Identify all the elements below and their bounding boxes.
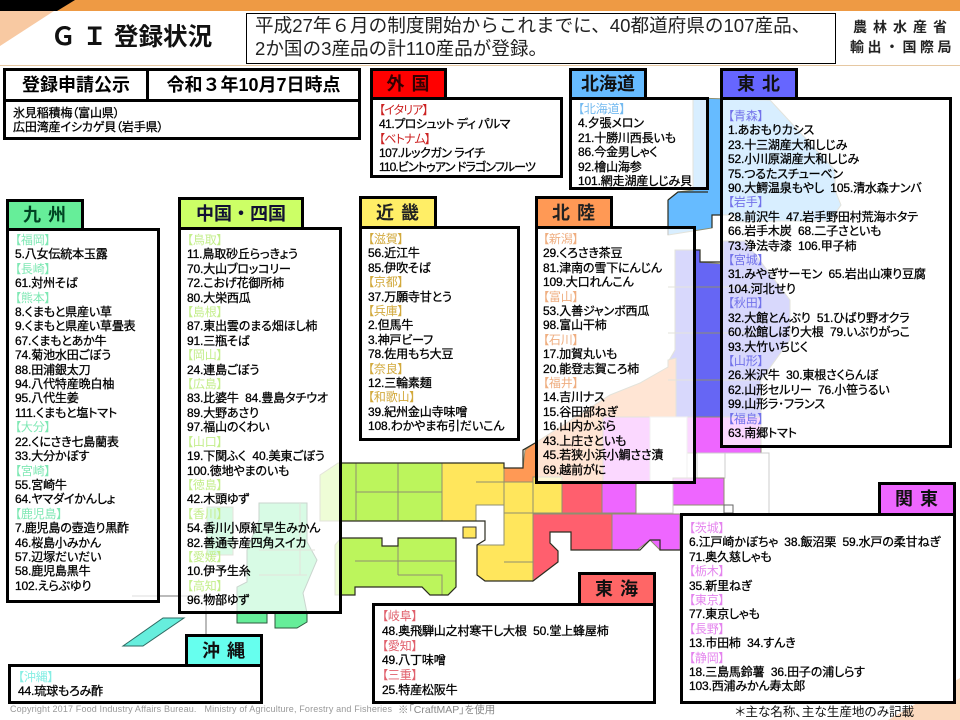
text: Hokuriku list: 69.越前がに — [543, 462, 606, 476]
text: Kanto list: 18.三島馬鈴薯 36.田子の浦しらす — [689, 665, 865, 679]
text: Chugoku and Shikoku list: 【愛媛】 — [187, 550, 222, 564]
text: Kanto list: 35.新里ねぎ — [689, 579, 751, 593]
text: Okinawa list — [18, 670, 103, 698]
panel: Tokai — [372, 572, 656, 704]
tab: Kinki: 近 畿 — [376, 203, 420, 223]
text: Chugoku and Shikoku list: 【広島】 — [187, 377, 222, 391]
text: Tokai list: 48.奥飛騨山之村寒干し大根 50.堂上蜂屋柿 — [382, 624, 609, 638]
box: Tokai — [372, 603, 656, 704]
ministry name: 輸出・国際局 — [850, 39, 955, 55]
text: Chugoku and Shikoku list — [187, 233, 328, 607]
text: Chugoku and Shikoku list: 【徳島】 — [187, 478, 222, 492]
text: Chugoku and Shikoku list: 【島根】 — [187, 305, 222, 319]
text: Hokuriku list: 109.大口れんこん — [543, 275, 634, 289]
text: Kinki list: 12.三輪素麺 — [368, 376, 432, 390]
text: Hokuriku list: 【新潟】 — [543, 232, 578, 246]
text: Kinki list — [368, 232, 504, 433]
map region: Shikoku — [335, 538, 456, 595]
text: Kanto list: 6.江戸崎かぼちゃ 38.飯沼栗 59.水戸の柔甘ねぎ — [689, 535, 940, 549]
text: Kinki list: 【滋賀】 — [368, 232, 403, 246]
ministry name — [850, 19, 955, 55]
box: Chugoku and Shikoku — [178, 227, 342, 614]
text: Chugoku and Shikoku list: 70.大山ブロッコリー — [187, 262, 291, 276]
text: Kyushu list — [15, 233, 136, 593]
text: Kyushu list: 【熊本】 — [15, 291, 50, 305]
text: Kyushu list: 67.くまもとあか牛 — [15, 334, 106, 348]
tab: Okinawa — [185, 634, 263, 666]
text: Hokuriku list: 43.上庄さといも — [543, 434, 626, 448]
text: Kanto list: 【長野】 — [689, 622, 724, 636]
text: Kanto list: 【栃木】 — [689, 564, 724, 578]
text: Chugoku and Shikoku list: 80.大栄西瓜 — [187, 291, 251, 305]
text: application list — [13, 106, 163, 134]
text: Hokuriku list: 98.富山干柿 — [543, 318, 607, 332]
text: Kyushu list: 111.くまもと塩トマト — [15, 406, 117, 420]
text: Kanto list: 71.奥久慈しゃも — [689, 550, 772, 564]
text: Tohoku list: 【青森】 — [728, 109, 763, 123]
text: Hokuriku list — [543, 232, 664, 476]
text: Chugoku and Shikoku list: 【香川】 — [187, 507, 222, 521]
text: Chugoku and Shikoku list: 96.物部ゆず — [187, 593, 249, 607]
text: Chugoku and Shikoku list: 【鳥取】 — [187, 233, 222, 247]
text: Hokuriku list: 【富山】 — [543, 290, 578, 304]
text: Kanto list: 103.西浦みかん寿太郎 — [689, 679, 805, 693]
text: Tohoku list: 【山形】 — [728, 354, 763, 368]
text: Tohoku list: 73.浄法寺漆 106.甲子柿 — [728, 239, 856, 253]
tab: Chugoku and Shikoku — [178, 197, 304, 229]
text: Kyushu list: 46.桜島小みかん — [15, 536, 101, 550]
map region: Kinki — [442, 463, 562, 581]
text: Hokkaido list: 21.十勝川西長いも — [578, 131, 676, 145]
panel: Kinki — [359, 196, 520, 441]
tab: Hokuriku — [535, 196, 613, 228]
map region: Tohoku — [668, 241, 790, 417]
tab: foreign: 外 国 — [386, 74, 430, 94]
text: Tohoku list: 66.岩手木炭 68.二子さといも — [728, 224, 881, 238]
tab: Tokai: 東 海 — [595, 579, 639, 599]
text: Kinki list: 56.近江牛 — [368, 246, 420, 260]
box: Hokuriku — [535, 226, 696, 484]
text: Tokai list — [382, 609, 609, 697]
text: Tokai list: 【愛知】 — [382, 639, 417, 653]
text: foreign list: 110.ビントゥアン ドラゴンフルーツ — [379, 160, 535, 174]
text: foreign list: 107.ルックガン ライチ — [379, 146, 485, 160]
box: Kinki — [359, 226, 520, 441]
panel: Hokkaido — [569, 68, 709, 190]
text: Hokuriku list: 15.谷田部ねぎ — [543, 405, 617, 419]
text: Tohoku list: 1.あおもりカシス — [728, 123, 814, 137]
panel: Chugoku and Shikoku — [178, 197, 342, 614]
text: foreign list: 【ベトナム】 — [379, 132, 430, 146]
text: Kanto list: 【静岡】 — [689, 651, 724, 665]
tab: Tokai — [578, 572, 656, 605]
tab: Chugoku and Shikoku: 中国・四国 — [196, 204, 286, 224]
text: Kyushu list: 【宮崎】 — [15, 464, 50, 478]
text: Kyushu list: 【鹿児島】 — [15, 507, 62, 521]
panel: application notice — [3, 68, 361, 140]
text: Tohoku list: 26.米沢牛 30.東根さくらんぼ — [728, 368, 878, 382]
text: Tohoku list: 60.松館しぼり大根 79.いぶりがっこ — [728, 325, 910, 339]
box: Kyushu — [6, 228, 160, 603]
text: Hokkaido list: 86.今金男しゃく — [578, 145, 657, 159]
map coastlines — [341, 192, 720, 595]
text: Kanto list: 【東京】 — [689, 593, 724, 607]
text: Kyushu list: 61.対州そば — [15, 276, 78, 290]
text: Chugoku and Shikoku list: 【高知】 — [187, 579, 222, 593]
text: Kinki list: 3.神戸ビーフ — [368, 333, 433, 347]
box: Tohoku — [720, 97, 952, 448]
text: Kinki list: 【京都】 — [368, 275, 403, 289]
text: Kinki list: 【奈良】 — [368, 362, 403, 376]
text: Tohoku list: 93.大竹いちじく — [728, 340, 808, 354]
text: Kanto list: 77.東京しゃも — [689, 607, 760, 621]
text: Hokuriku list: 【石川】 — [543, 333, 578, 347]
text: Chugoku and Shikoku list: 72.こおげ花御所柿 — [187, 276, 284, 290]
text: Chugoku and Shikoku list: 42.木頭ゆず — [187, 492, 249, 506]
tab: Hokuriku: 北 陸 — [552, 203, 596, 223]
text: Kyushu list: 7.鹿児島の壺造り黒酢 — [15, 521, 129, 535]
text: Tohoku list: 28.前沢牛 47.岩手野田村荒海ホタテ — [728, 210, 918, 224]
text: Chugoku and Shikoku list: 19.下関ふく 40.美東ごぼう — [187, 449, 325, 463]
tab: Hokkaido — [569, 68, 647, 99]
text: Okinawa list: 【沖縄】 — [18, 670, 53, 684]
text: Kanto list: 【茨城】 — [689, 521, 724, 535]
map region: Tokai — [533, 514, 612, 581]
text: Tohoku list: 32.大館とんぶり 51.ひばり野オクラ — [728, 311, 909, 325]
text: Tohoku list: 【福島】 — [728, 412, 763, 426]
text: Kyushu list: 9.くまもと県産い草畳表 — [15, 319, 136, 333]
text: Tohoku list — [728, 109, 926, 440]
text: Hokuriku list: 81.津南の雪下にんじん — [543, 261, 662, 275]
text: Tohoku list: 99.山形ラ･フランス — [728, 397, 825, 411]
text: Kyushu list: 58.鹿児島黒牛 — [15, 564, 90, 578]
text: Kinki list: 108.わかやま布引だいこん — [368, 419, 504, 433]
text: Kinki list: 39.紀州金山寺味噌 — [368, 405, 467, 419]
text: Hokuriku list: 53.入善ジャンボ西瓜 — [543, 304, 649, 318]
text: foreign list — [379, 103, 536, 174]
text: Hokkaido list: 92.檜山海参 — [578, 160, 642, 174]
text: Tohoku list: 104.河北せり — [728, 282, 796, 296]
map region: Okinawa — [123, 618, 184, 646]
box: foreign — [370, 97, 563, 178]
tab: Okinawa: 沖 縄 — [202, 641, 246, 661]
text: Kanto list: 13.市田柿 34.すんき — [689, 636, 796, 650]
box: Hokkaido — [569, 97, 709, 190]
tab: Kyushu: 九 州 — [23, 205, 67, 225]
text: Tokai list: 49.八丁味噌 — [382, 653, 446, 667]
text: Chugoku and Shikoku list: 83.比婆牛 84.豊島タチウオ — [187, 391, 328, 405]
text: Tohoku list: 63.南郷トマト — [728, 426, 797, 440]
title: Ｇ Ｉ 登録状況 — [51, 24, 212, 51]
text: Kyushu list: 57.辺塚だいだい — [15, 550, 101, 564]
tab: foreign — [370, 68, 447, 99]
text: Okinawa list: 44.琉球もろみ酢 — [18, 684, 103, 698]
text: Kyushu list: 【福岡】 — [15, 233, 50, 247]
text: Tohoku list: 90.大鰐温泉もやし 105.清水森ナンバ — [728, 181, 922, 195]
text: Kyushu list: 74.菊池水田ごぼう — [15, 348, 111, 362]
text: Tohoku list: 【岩手】 — [728, 195, 763, 209]
text: Hokkaido list — [578, 102, 692, 188]
map region: Kanto south — [612, 514, 680, 550]
text: Chugoku and Shikoku list: 97.福山のくわい — [187, 420, 270, 434]
text: Kyushu list: 5.八女伝統本玉露 — [15, 247, 108, 261]
box: Okinawa — [8, 664, 263, 704]
text: Kyushu list: 【大分】 — [15, 420, 50, 434]
map region: Kyushu — [237, 503, 317, 628]
text: Hokuriku list: 29.くろさき茶豆 — [543, 246, 622, 260]
text: Tokai list: 【岐阜】 — [382, 609, 417, 623]
text: Kyushu list: 94.八代特産晩白柚 — [15, 377, 114, 391]
text: Hokuriku list: 14.吉川ナス — [543, 390, 605, 404]
text: Tohoku list: 52.小川原湖産大和しじみ — [728, 152, 859, 166]
map credit: ※「CraftMAP」を使用 — [398, 704, 495, 716]
copyright: Copyright 2017 Food Industry Affairs Bureau. Ministry of Agriculture, Forestry and Fisheries — [10, 704, 392, 714]
text: Chugoku and Shikoku list: 【岡山】 — [187, 348, 222, 362]
box: Kanto — [680, 513, 956, 704]
tab: Hokkaido: 北海道 — [581, 74, 635, 94]
tab: Kanto: 関 東 — [895, 489, 939, 509]
text: Kinki list: 【和歌山】 — [368, 390, 415, 404]
map region: Chugoku — [320, 463, 442, 521]
panel: Hokuriku — [535, 196, 696, 484]
text: application list: 氷見稲積梅（富山県） — [13, 106, 120, 120]
text: Kyushu list: 95.八代生姜 — [15, 391, 79, 405]
text: Tohoku list: 【秋田】 — [728, 296, 763, 310]
tab: Kanto — [878, 482, 956, 515]
text: Kyushu list: 33.大分かぼす — [15, 449, 89, 463]
text: Kyushu list: 22.くにさき七島藺表 — [15, 435, 119, 449]
text: Kanto list — [689, 521, 941, 693]
text: Hokuriku list: 17.加賀丸いも — [543, 347, 617, 361]
text: Kyushu list: 55.宮崎牛 — [15, 478, 67, 492]
text: Kinki list: 【兵庫】 — [368, 304, 403, 318]
panel: Okinawa — [8, 634, 263, 704]
text: Chugoku and Shikoku list: 24.連島ごぼう — [187, 363, 259, 377]
text: Kyushu list: 【長崎】 — [15, 262, 50, 276]
headline summary box: 平成27年６月の制度開始からこれまでに、40都道府県の107産品、 — [255, 15, 810, 36]
footnote: ＊主な名称、主な生産地のみ記載 — [735, 705, 914, 719]
text: Kinki list: 2.但馬牛 — [368, 318, 413, 332]
panel: Kanto — [680, 482, 956, 704]
tab: Tohoku: 東 北 — [737, 74, 781, 94]
map inner boundaries — [132, 250, 760, 634]
text: Hokuriku list: 45.若狭小浜小鯛ささ漬 — [543, 448, 663, 462]
panel: foreign — [370, 68, 563, 178]
text: Kyushu list: 64.ヤマダイかんしょ — [15, 492, 115, 506]
text: Tokai list: 25.特産松阪牛 — [382, 683, 457, 697]
text: Hokuriku list: 【福井】 — [543, 376, 578, 390]
map region: east coast outline — [724, 453, 769, 540]
text: Chugoku and Shikoku list: 82.善通寺産四角スイカ — [187, 536, 306, 550]
text: Hokkaido list: 【北海道】 — [578, 102, 625, 116]
text: foreign list: 【イタリア】 — [379, 103, 428, 117]
text: Chugoku and Shikoku list: 89.大野あさり — [187, 406, 259, 420]
text: Kinki list: 85.伊吹そば — [368, 261, 431, 275]
ministry name: 農林水産省 — [853, 19, 953, 35]
text: Kyushu list: 102.えらぶゆり — [15, 579, 91, 593]
text: Chugoku and Shikoku list: 54.香川小原紅早生みかん — [187, 521, 320, 535]
text: Tohoku list: 62.山形セルリー 76.小笹うるい — [728, 383, 890, 397]
text: foreign list: 41.プロシュット ディ パルマ — [379, 117, 510, 131]
map region: Hokkaido — [668, 98, 841, 235]
text: Chugoku and Shikoku list: 91.三瓶そば — [187, 334, 250, 348]
text: Kinki list: 78.佐用もち大豆 — [368, 347, 453, 361]
text: Tokai list: 【三重】 — [382, 668, 417, 682]
map region: Hokuriku — [504, 358, 676, 482]
panel: Kyushu — [6, 199, 160, 603]
text: Tohoku list: 75.つるたスチューベン — [728, 167, 843, 181]
panel: Tohoku — [720, 68, 952, 448]
text: Hokkaido list: 4.夕張メロン — [578, 116, 644, 130]
headline summary box: 2か国の3産品の計110産品が登録。 — [255, 38, 547, 59]
text: Kyushu list: 8.くまもと県産い草 — [15, 305, 112, 319]
text: Hokuriku list: 20.能登志賀ころ柿 — [543, 362, 639, 376]
text: Chugoku and Shikoku list: 87.東出雲のまる畑ほし柿 — [187, 319, 317, 333]
tab: Tohoku — [720, 68, 798, 99]
heading: date: 令和３年10月7日時点 — [166, 75, 341, 95]
text: Hokuriku list: 16.山内かぶら — [543, 419, 616, 433]
text: Tohoku list: 31.みやぎサーモン 65.岩出山凍り豆腐 — [728, 267, 926, 281]
text: Chugoku and Shikoku list: 11.鳥取砂丘らっきょう — [187, 247, 298, 261]
text: Hokkaido list: 101.網走湖産しじみ貝 — [578, 174, 692, 188]
tab: Kinki — [359, 196, 437, 228]
text: Kinki list: 37.万願寺甘とう — [368, 290, 452, 304]
text: Tohoku list: 23.十三湖産大和しじみ — [728, 138, 847, 152]
text: Kyushu list: 88.田浦銀太刀 — [15, 363, 90, 377]
text: Chugoku and Shikoku list: 【山口】 — [187, 435, 222, 449]
headline summary box — [246, 13, 836, 64]
text: Chugoku and Shikoku list: 100.徳地やまのいも — [187, 464, 289, 478]
heading: application notice: 登録申請公示 — [22, 75, 130, 95]
text: Chugoku and Shikoku list: 10.伊予生糸 — [187, 564, 251, 578]
text: Tohoku list: 【宮城】 — [728, 253, 763, 267]
tab: Kyushu — [6, 199, 84, 230]
text: application list: 広田湾産イシカゲ貝（岩手県） — [13, 120, 163, 134]
map region: Kanto north — [603, 417, 650, 483]
